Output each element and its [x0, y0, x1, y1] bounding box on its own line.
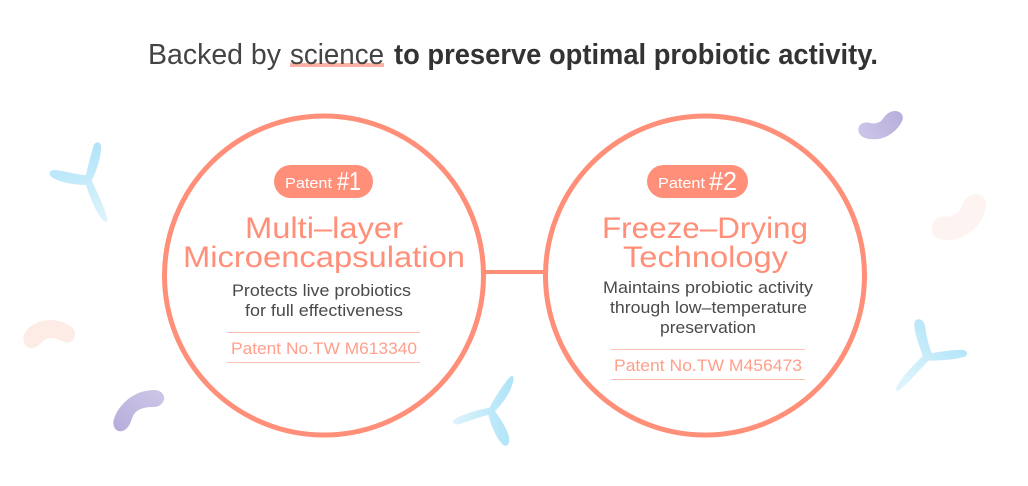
description 2: preservation — [660, 319, 756, 337]
badge: patent #2 — [647, 165, 748, 198]
badge: patent #2: Patent — [658, 175, 706, 192]
icon: blue antibody left — [50, 142, 107, 222]
heading: Multi-layer Microencapsulation — [183, 212, 465, 274]
badge: patent #1: Patent — [285, 175, 333, 192]
icon: purple bean left — [113, 390, 164, 431]
icon: purple bean right — [858, 111, 903, 139]
icon: peach bean right — [932, 194, 986, 240]
icon: blue antibody bottom centre — [453, 376, 514, 446]
heading: Freeze-Drying Technology — [602, 212, 808, 274]
description 2 — [603, 279, 814, 337]
badge: patent #1: #1 — [337, 166, 361, 196]
description 1: for full effectiveness — [245, 302, 403, 320]
circle outline 1 — [164, 116, 484, 435]
heading: Freeze-Drying Technology: Technology — [623, 241, 788, 274]
description 2: through low–temperature — [610, 299, 807, 317]
heading: Multi-layer Microencapsulation: Multi–layer — [245, 212, 403, 245]
panel: patent 2 — [546, 116, 864, 435]
patent number 1: Patent No.TW M613340 — [231, 339, 417, 358]
connector between circles — [484, 270, 546, 274]
icon: peach bean left — [23, 320, 75, 348]
description 1 — [232, 282, 411, 320]
title: underlined word science: science — [290, 39, 384, 71]
description 1: Protects live probiotics — [232, 282, 411, 300]
patent number 2: Patent No.TW M456473 — [614, 356, 802, 375]
description 2: Maintains probiotic activity — [603, 279, 814, 297]
badge: patent #1 — [274, 165, 373, 198]
circle outline 2 — [546, 116, 864, 435]
title: light part: Backed by — [148, 39, 281, 71]
heading: Freeze-Drying Technology: Freeze–Drying — [602, 212, 808, 245]
icon: blue antibody right — [896, 319, 967, 391]
title — [148, 39, 878, 71]
title: bold part: to preserve optimal probiotic activity. — [394, 39, 878, 71]
panel: patent 1 — [164, 116, 484, 435]
badge: patent #2: #2 — [709, 166, 737, 196]
heading: Multi-layer Microencapsulation: Microencapsulation — [183, 241, 465, 274]
